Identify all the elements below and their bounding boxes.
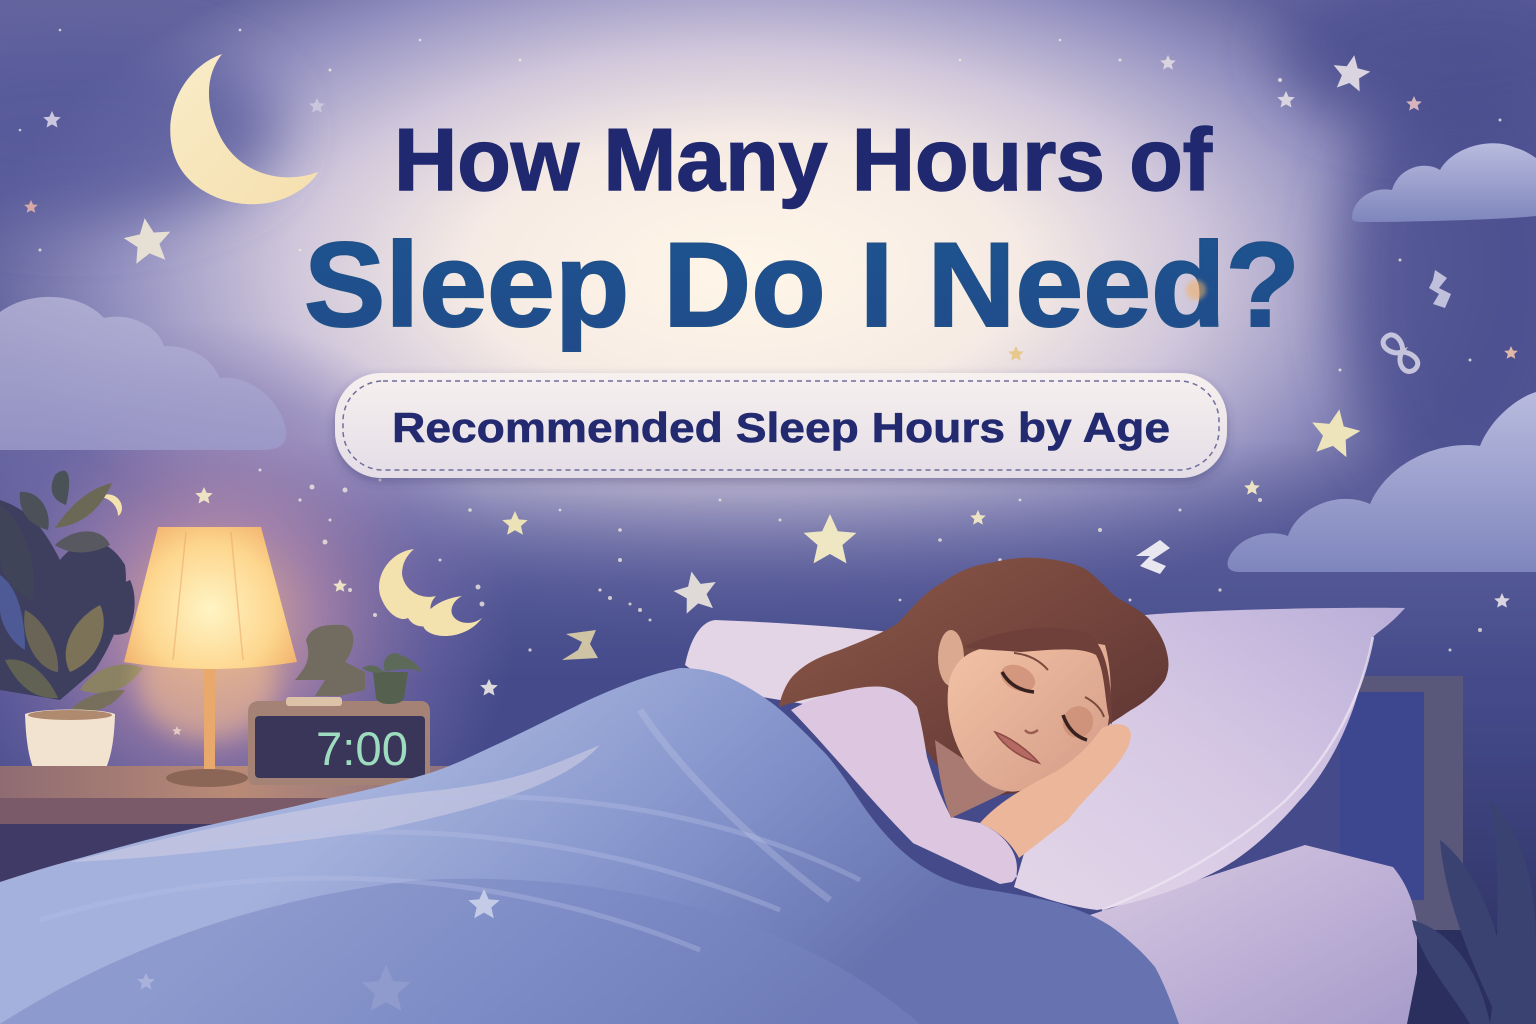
eyelids — [997, 653, 1104, 743]
back pillow — [685, 620, 900, 720]
cloud: upper right — [1352, 143, 1536, 222]
ear — [938, 630, 964, 686]
corner plant — [1412, 800, 1536, 1024]
subtitle pill — [335, 373, 1227, 478]
hair behind — [779, 558, 1168, 800]
decor on table — [286, 625, 422, 706]
nightstand — [0, 766, 470, 884]
bangs — [964, 628, 1112, 725]
subtitle pill: Recommended Sleep Hours by Age — [392, 404, 1170, 451]
blanket — [0, 668, 1179, 1024]
alarm clock: 7:00 — [316, 722, 408, 775]
cloud: left middle — [0, 297, 286, 450]
table lamp — [124, 527, 297, 787]
mouth — [995, 732, 1039, 763]
sleeve — [913, 823, 1017, 884]
crescent moon — [170, 54, 318, 204]
woman sleeping — [779, 558, 1168, 884]
speckled starfield — [19, 29, 1502, 681]
neck — [935, 740, 1010, 818]
torso in pajama — [791, 686, 1017, 883]
nose — [1025, 730, 1038, 733]
cloud: right lower — [1228, 392, 1536, 572]
small crescent moons — [100, 494, 482, 636]
alarm clock — [248, 701, 430, 785]
bed headboard — [1340, 676, 1536, 1024]
front pillow — [1014, 608, 1405, 910]
arm and hand — [980, 724, 1131, 858]
face — [948, 642, 1111, 792]
decorative stars — [24, 52, 1518, 735]
plant — [0, 471, 143, 783]
title — [304, 110, 1300, 352]
warm light spot on title — [1186, 280, 1206, 300]
title: How Many Hours of — [394, 110, 1213, 209]
mattress and sheet — [1090, 845, 1417, 1024]
title: Sleep Do I Need? — [304, 218, 1300, 352]
small doodles — [562, 270, 1451, 660]
